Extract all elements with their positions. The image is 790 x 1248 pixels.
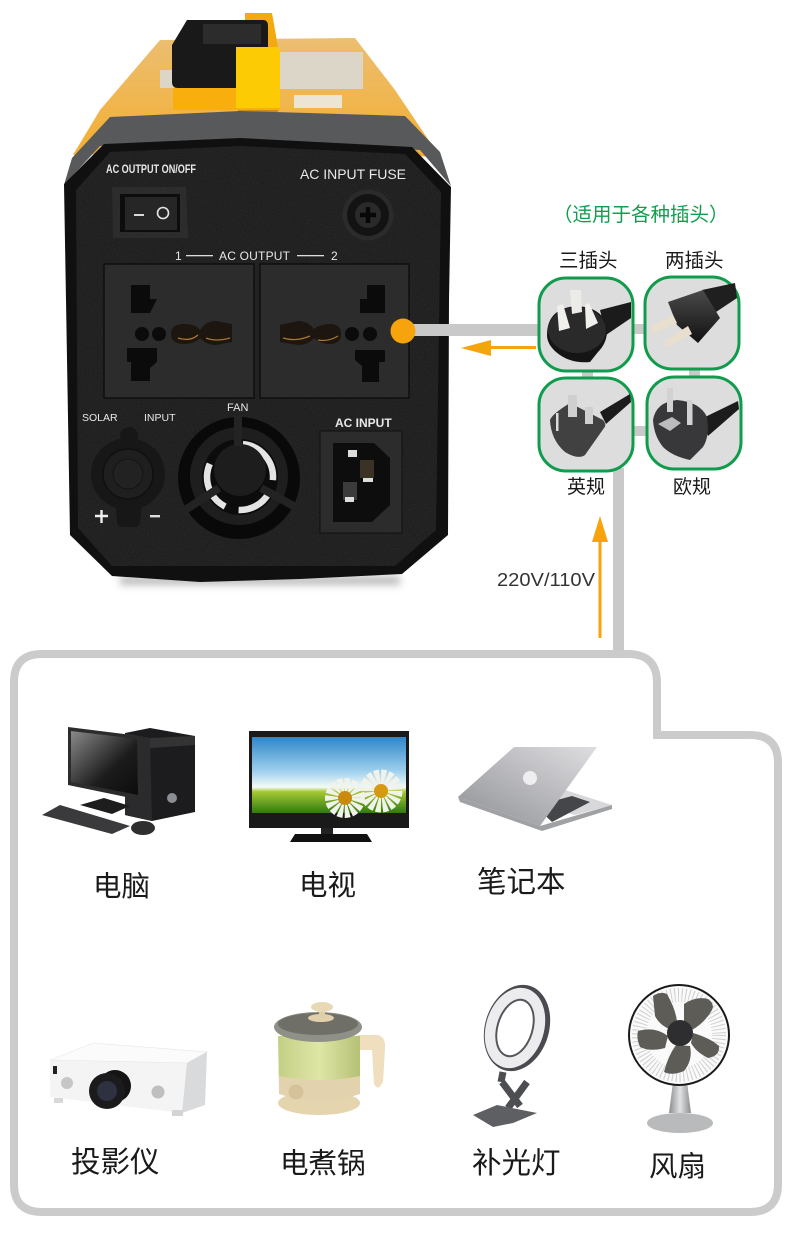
appliance: computer: [42, 727, 195, 835]
label: AC input: AC INPUT: [335, 416, 392, 430]
label: AC output: AC OUTPUT: [219, 249, 291, 263]
label: fan: FAN: [227, 402, 248, 414]
handle: [172, 13, 280, 120]
label: two-pin: 两插头: [665, 250, 724, 272]
power station device: [64, 13, 451, 585]
fuse holder: [342, 190, 394, 240]
grey shell band: [64, 111, 451, 186]
front panel: [64, 138, 451, 582]
solar input cap: [91, 427, 165, 527]
device top casing: [73, 38, 440, 157]
label: EU: 欧规: [673, 476, 711, 498]
label: computer: 电脑: [93, 871, 150, 903]
orange arrow: voltage: [592, 516, 608, 638]
appliance: ring light: [473, 977, 560, 1127]
label: projector: 投影仪: [71, 1146, 160, 1179]
label: on/off: AC OUTPUT ON/OFF: [106, 164, 196, 176]
label: solar input: INPUT: [144, 412, 176, 424]
voltage label: 220V/110V: [497, 570, 595, 590]
polarity marks: [95, 510, 108, 523]
connector lines: [412, 324, 700, 654]
label: AC output: 2: [331, 249, 338, 263]
card: two-pin plug: [645, 277, 739, 369]
plug: [547, 290, 631, 362]
label: AC output: [175, 249, 338, 263]
appliance: TV: [249, 731, 409, 842]
socket 2: [260, 264, 409, 398]
AC inlet: [320, 431, 402, 533]
label: laptop: 笔记本: [477, 866, 566, 899]
plug: [550, 394, 631, 457]
label: UK: 英规: [567, 476, 605, 498]
socket 1: [104, 264, 254, 398]
label: fuse: AC INPUT FUSE: [300, 166, 406, 182]
flowers: [332, 777, 395, 811]
label: AC output: 1: [175, 249, 182, 263]
label: three-pin: 三插头: [559, 250, 618, 272]
label: fan: 风扇: [649, 1151, 706, 1183]
appliance: laptop: [458, 747, 612, 831]
plugs heading: （适用于各种插头）: [553, 204, 729, 226]
card: EU plug: [647, 377, 741, 469]
plug: [653, 388, 739, 460]
callout dot: [390, 318, 416, 344]
rating label: [280, 52, 363, 89]
appliance: desk fan: [629, 985, 729, 1133]
label: solar input: SOLAR: [82, 412, 118, 424]
plug: [650, 283, 737, 347]
appliance: kettle: [274, 1002, 385, 1115]
fan blades: [637, 993, 719, 1074]
label: ring light: 补光灯: [472, 1147, 561, 1180]
device shadow: [120, 576, 400, 585]
appliance: projector: [50, 1043, 207, 1116]
card: three-pin plug: [539, 278, 633, 371]
orange arrow: to socket: [461, 340, 536, 356]
cooling fan: [178, 416, 300, 539]
panel: compatible appliances: [14, 654, 778, 1212]
label: kettle: 电煮锅: [280, 1148, 366, 1180]
label: solar input: [82, 412, 176, 424]
card: UK plug: [539, 378, 633, 471]
rocker switch: [112, 187, 188, 238]
label: TV: 电视: [299, 870, 356, 902]
